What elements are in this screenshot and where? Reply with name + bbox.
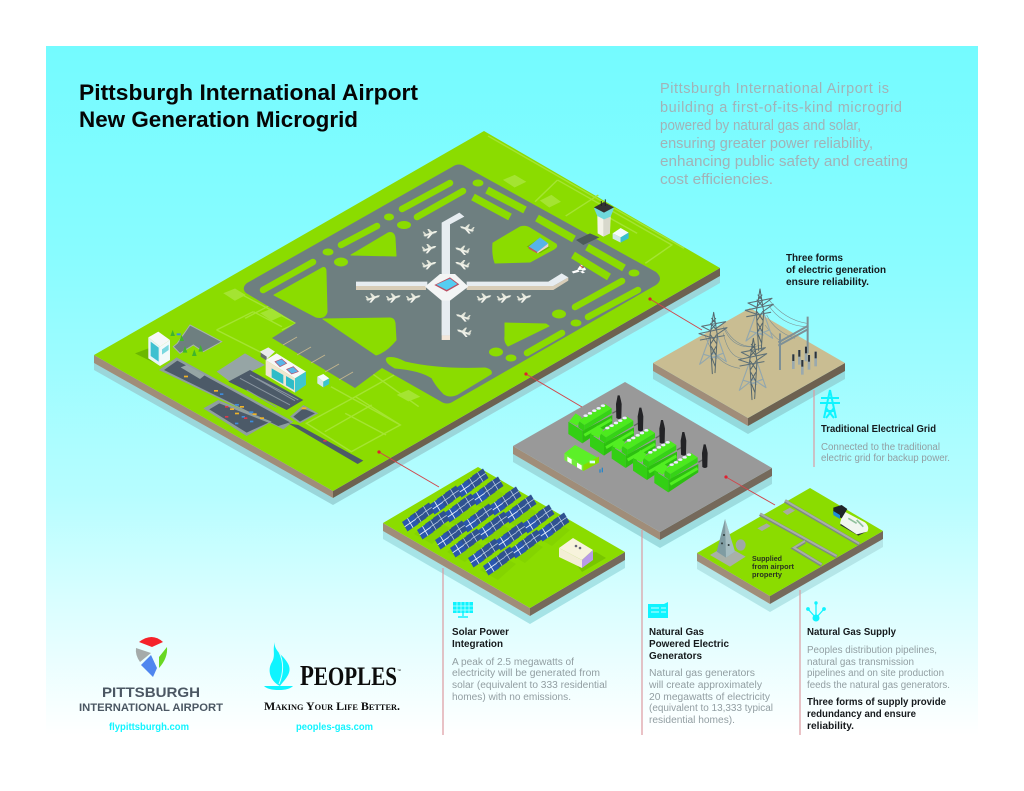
text: natural gas generators: [648, 627, 773, 726]
text: natural gas generators: will create approximately: [648, 680, 762, 691]
grass islands and strips: [274, 226, 557, 396]
text: natural gas generators: (equivalent to 13,333 typical: [649, 703, 773, 714]
label: supplied from airport property: property: [752, 570, 783, 579]
text: traditional electrical grid: Traditional Electrical Grid: [821, 424, 936, 435]
text: natural gas generators: Natural gas generators: [649, 668, 755, 679]
label: supplied from airport property: from airport: [752, 562, 794, 571]
text: solar power: A peak of 2.5 megawatts of: [452, 657, 574, 668]
icon: generator: [648, 602, 668, 618]
icon: solar panel: [453, 602, 473, 617]
intro text: building a first-of-its-kind microgrid: [660, 100, 902, 116]
text: natural gas supply: pipelines and on site production: [807, 668, 944, 679]
text: natural gas supply: redundancy and ensure: [807, 709, 916, 720]
text: natural gas supply: natural gas transmission: [807, 657, 914, 668]
intro text: Pittsburgh International Airport is: [660, 81, 889, 97]
text: traditional electrical grid: electric grid for backup power.: [821, 453, 950, 464]
hotel: [135, 332, 170, 366]
logo: Pittsburgh International Airport: flypittsburgh.com: [109, 722, 189, 733]
plate: natural gas supply: [697, 488, 883, 612]
trees: [170, 330, 203, 356]
text: natural gas supply: reliability.: [807, 721, 854, 732]
small building: [613, 228, 629, 243]
hangar: [527, 237, 550, 253]
text: natural gas supply: Three forms of supply provide: [807, 697, 946, 708]
transmission towers and substation: [699, 289, 816, 400]
background panel: [46, 46, 978, 735]
solar panel arrays: [402, 468, 570, 580]
control tower: [576, 199, 614, 245]
callout: three forms of electric generation: [786, 253, 886, 288]
intro text: cost efficiencies.: [660, 172, 773, 188]
intro text: enhancing public safety and creating: [660, 154, 908, 170]
tarmac: [244, 164, 660, 404]
label: supplied from airport property: [752, 554, 794, 579]
workers: [599, 468, 603, 473]
logo: Peoples: peoples-gas.com: [296, 722, 373, 733]
logo: Pittsburgh International Airport: [79, 637, 223, 733]
field markings: [217, 136, 684, 452]
plate: solar power: [383, 467, 625, 624]
logo: Peoples: Making Your Life Better.: [264, 701, 400, 713]
logo: Pittsburgh International Airport: PITTSBURGH: [102, 684, 200, 700]
apron markings: [283, 337, 353, 380]
text: solar power: Integration: [452, 639, 503, 650]
text: natural gas generators: Generators: [649, 651, 702, 662]
title: New Generation Microgrid: [79, 107, 358, 132]
text: natural gas supply: [807, 627, 950, 732]
text: natural gas supply: Peoples distribution pipelines,: [807, 645, 937, 656]
text: traditional electrical grid: [821, 424, 950, 464]
text: solar power: homes) with no emissions.: [452, 692, 571, 703]
intro text: ensuring greater power reliability,: [660, 136, 873, 152]
label: supplied from airport property: Supplied: [752, 554, 782, 563]
text: natural gas generators: residential homes).: [649, 715, 735, 726]
terminal building: [260, 347, 306, 393]
text: natural gas supply: feeds the natural gas generators.: [807, 680, 950, 691]
text: natural gas generators: 20 megawatts of electricity: [649, 692, 770, 703]
title: [79, 80, 419, 132]
icon: transmission tower: [820, 390, 840, 418]
cars: [184, 376, 306, 419]
plate: natural gas generators: [513, 382, 772, 548]
terminal and planes: [356, 199, 629, 340]
text: solar power: [452, 627, 607, 703]
text: natural gas generators: Powered Electric: [649, 639, 729, 650]
text: natural gas generators: Natural Gas: [649, 627, 704, 638]
icon: gas supply: [806, 601, 826, 622]
logo: Peoples: [264, 642, 401, 733]
text: solar power: Solar Power: [452, 627, 509, 638]
callout: three forms of electric generation: Three forms: [786, 253, 843, 264]
generator units: [564, 395, 708, 492]
intro text: [660, 81, 908, 188]
connector lines: [377, 297, 814, 735]
pipelines, derrick and tanker truck: [710, 500, 868, 567]
callout: three forms of electric generation: of electric generation: [786, 265, 886, 276]
plate: airport: [94, 131, 720, 505]
logo: Peoples: ™: [397, 668, 401, 673]
logo: Pittsburgh International Airport: INTERNATIONAL AIRPORT: [79, 702, 223, 714]
text: natural gas supply: Natural Gas Supply: [807, 627, 896, 638]
plate: traditional electrical grid: [653, 289, 845, 434]
text: solar power: electricity will be generated from: [452, 668, 600, 679]
inverter building: [559, 538, 606, 572]
small green building: [564, 445, 599, 471]
kiosk: [317, 374, 329, 387]
intro text: powered by natural gas and solar,: [660, 118, 861, 134]
title: Pittsburgh International Airport: [79, 80, 419, 105]
callout: three forms of electric generation: ensure reliability.: [786, 277, 869, 288]
text: traditional electrical grid: Connected to the traditional: [821, 442, 940, 453]
landside roads and buildings: [135, 325, 363, 464]
text: solar power: solar (equivalent to 333 residential: [452, 680, 607, 691]
logo: Peoples: PEOPLES: [300, 661, 397, 692]
